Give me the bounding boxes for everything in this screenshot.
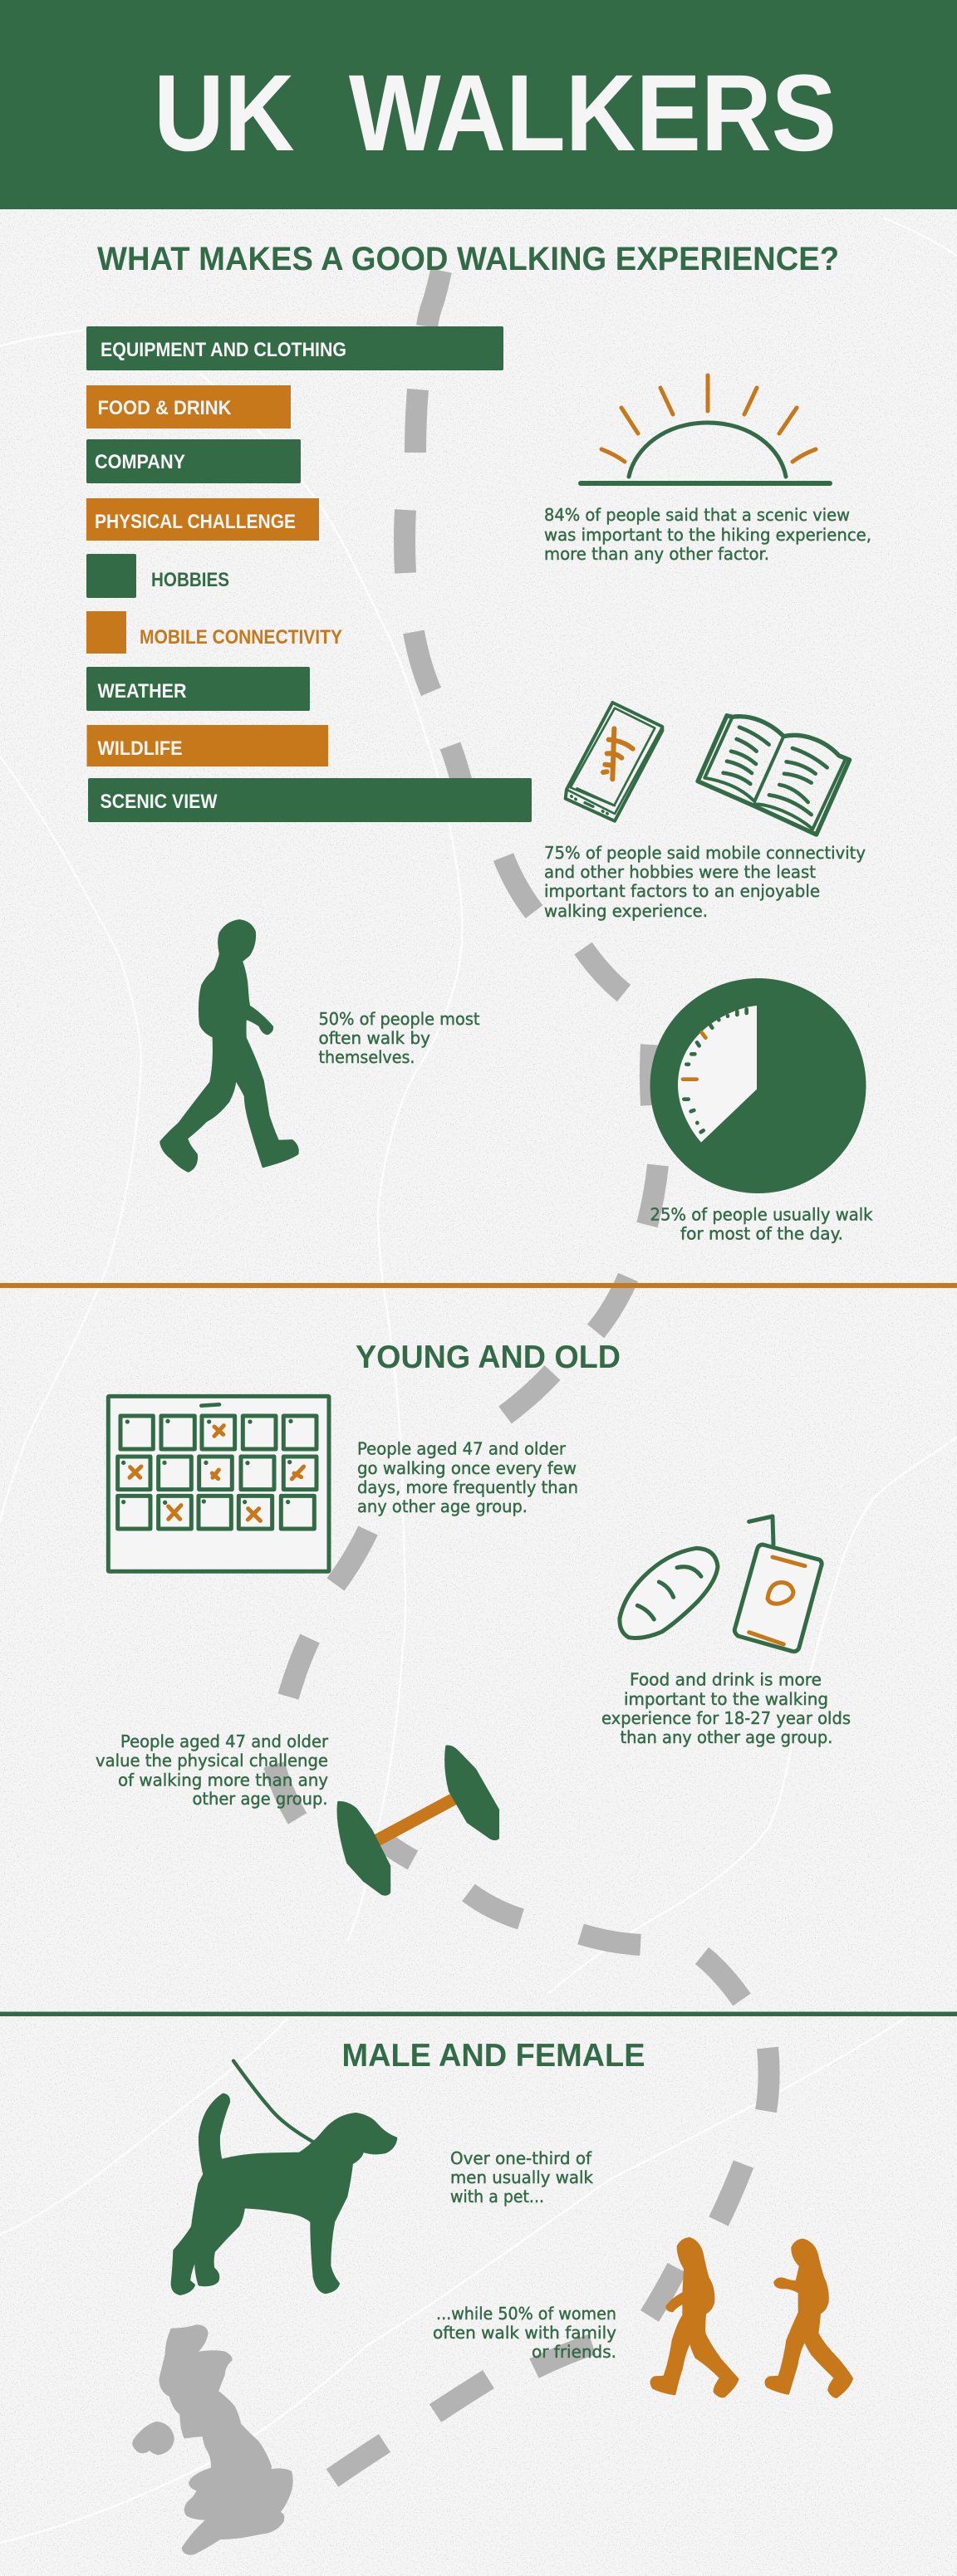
text: food and drink stat: experience for 18-27 year olds xyxy=(601,1708,851,1728)
text: mobile connectivity stat: walking experience. xyxy=(544,901,708,921)
text: physical challenge stat: value the physical challenge xyxy=(96,1751,328,1770)
text: walking frequency stat: go walking once every few xyxy=(357,1458,577,1478)
bar: weather xyxy=(86,667,310,711)
text: physical challenge stat: People aged 47 and older xyxy=(120,1731,329,1751)
text: food and drink stat: than any other age group. xyxy=(620,1727,832,1747)
text: men with pets stat xyxy=(450,2148,593,2206)
bar chart: factors xyxy=(86,326,532,822)
icon: map of the UK xyxy=(134,2326,292,2554)
bar: equipment and clothing: EQUIPMENT AND CLOTHING xyxy=(101,339,346,361)
bar: hobbies xyxy=(86,554,229,598)
text: mobile connectivity stat: and other hobbies were the least xyxy=(544,862,816,882)
bar: weather: WEATHER xyxy=(98,680,186,703)
text: food and drink stat: Food and drink is more xyxy=(630,1669,822,1689)
bar: equipment and clothing xyxy=(86,326,503,370)
text: physical challenge stat: of walking more than any xyxy=(118,1770,328,1790)
bar: scenic view xyxy=(88,778,532,822)
icon: dog on a lead xyxy=(172,2061,396,2294)
dashed walking route xyxy=(274,271,769,2478)
text: day long walk stat: 25% of people usually walk xyxy=(650,1204,873,1224)
text: walking frequency stat: People aged 47 and older xyxy=(357,1438,567,1458)
icon: dumbbell xyxy=(337,1746,499,1896)
bar: physical challenge xyxy=(86,498,319,541)
text: day long walk stat xyxy=(650,1204,873,1244)
icon: clock pie xyxy=(650,978,866,1193)
text: men with pets stat: men usually walk xyxy=(450,2167,593,2187)
text: women with family stat: often walk with family xyxy=(433,2323,616,2343)
icon: open book xyxy=(698,716,850,835)
text: mobile connectivity stat xyxy=(544,843,866,921)
text: women with family stat xyxy=(433,2304,616,2362)
heading: young and old: YOUNG AND OLD xyxy=(356,1339,621,1375)
text: scenic view stat: was important to the hiking experience, xyxy=(544,525,871,545)
bar: food and drink: FOOD & DRINK xyxy=(98,397,232,419)
icon: calendar xyxy=(108,1396,329,1571)
bar: company xyxy=(86,439,301,483)
title: UK WALKERS xyxy=(154,51,837,174)
heading: good walking experience: WHAT MAKES A GOOD WALKING EXPERIENCE? xyxy=(97,241,839,277)
text: mobile connectivity stat: important factors to an enjoyable xyxy=(544,881,820,901)
bar: mobile connectivity xyxy=(86,611,342,654)
text: food and drink stat: important to the walking xyxy=(624,1689,828,1709)
icon: drink carton xyxy=(734,1516,822,1652)
bar: wildlife: WILDLIFE xyxy=(98,737,183,760)
text: walking frequency stat: days, more frequently than xyxy=(357,1477,578,1497)
icon: bread xyxy=(620,1548,718,1638)
icon: two women walking xyxy=(652,2239,851,2397)
bar: food and drink xyxy=(86,385,291,429)
heading: male and female: MALE AND FEMALE xyxy=(342,2038,645,2074)
bar: physical challenge: PHYSICAL CHALLENGE xyxy=(95,511,296,533)
text: men with pets stat: with a pet... xyxy=(450,2187,544,2206)
text: walk alone stat: often walk by xyxy=(319,1028,430,1048)
text: walk alone stat: 50% of people most xyxy=(319,1009,480,1029)
icon: sunrise xyxy=(581,375,830,483)
text: women with family stat: ...while 50% of women xyxy=(436,2304,616,2324)
text: food and drink stat xyxy=(601,1669,851,1747)
text: day long walk stat: for most of the day. xyxy=(680,1224,843,1244)
text: women with family stat: or friends. xyxy=(532,2342,616,2362)
bar: company: COMPANY xyxy=(95,451,185,473)
text: physical challenge stat: other age group. xyxy=(193,1789,327,1809)
text: mobile connectivity stat: 75% of people said mobile connectivity xyxy=(544,843,866,863)
text: scenic view stat: 84% of people said that a scenic view xyxy=(544,505,850,525)
bar: hobbies: HOBBIES xyxy=(151,569,229,591)
text: men with pets stat: Over one-third of xyxy=(450,2148,592,2168)
icon: mobile phone xyxy=(566,703,662,821)
bar: scenic view: SCENIC VIEW xyxy=(100,791,218,813)
icon: solo walker xyxy=(160,920,298,1172)
header band xyxy=(0,0,957,209)
text: physical challenge stat xyxy=(96,1731,329,1809)
text: walk alone stat xyxy=(319,1009,480,1067)
text: walk alone stat: themselves. xyxy=(319,1047,415,1067)
text: walking frequency stat: any other age group. xyxy=(357,1496,528,1516)
bar: mobile connectivity: MOBILE CONNECTIVITY xyxy=(140,626,342,649)
bar: wildlife xyxy=(86,725,328,766)
text: scenic view stat xyxy=(544,505,871,564)
text: walking frequency stat xyxy=(357,1438,578,1516)
text: scenic view stat: more than any other factor. xyxy=(544,544,769,564)
